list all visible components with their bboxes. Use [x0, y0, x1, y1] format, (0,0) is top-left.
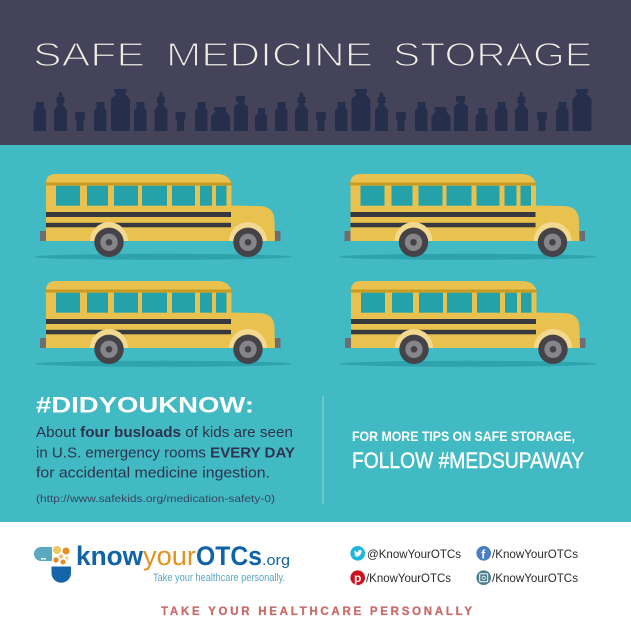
- heading: did you know: #DIDYOUKNOW:: [36, 392, 254, 418]
- footer slogan: TAKE YOUR HEALTHCARE PERSONALLY: [161, 606, 472, 618]
- source citation: (http://www.safekids.org/medication-safety-0): [36, 493, 275, 505]
- logo wordmark: [76, 541, 290, 571]
- title: STORAGE: [393, 37, 592, 74]
- callout: follow hashtag: FOLLOW #MEDSUPAWAY: [352, 448, 584, 473]
- bus: top right: [338, 174, 596, 260]
- title: SAFE: [33, 37, 145, 74]
- divider: [322, 396, 324, 504]
- social: twitter: @KnowYourOTCs: [367, 547, 461, 561]
- logo wordmark: your: [143, 541, 196, 571]
- text block: statistic: About four busloads of kids are seen: [36, 424, 293, 441]
- logo wordmark: .org: [262, 552, 290, 569]
- icon: know your OTCs logo mark: [34, 546, 71, 583]
- social: facebook: /KnowYourOTCs: [492, 547, 578, 561]
- social: pinterest: /KnowYourOTCs: [366, 571, 451, 585]
- bus: top left: [34, 174, 292, 260]
- bus: bottom left: [34, 281, 292, 367]
- text block: statistic: in U.S. emergency rooms EVERY DAY: [36, 445, 295, 462]
- callout: follow hashtag: FOR MORE TIPS ON SAFE STORAGE,: [352, 429, 575, 444]
- callout: follow hashtag: [352, 429, 584, 473]
- social: pinterest: p: [354, 571, 361, 585]
- panel: header: [0, 0, 631, 145]
- logo wordmark: OTCs: [196, 541, 262, 571]
- text block: statistic: [36, 424, 295, 482]
- title: [33, 37, 592, 74]
- social: instagram: /KnowYourOTCs: [492, 571, 578, 585]
- bus: bottom right: [339, 281, 597, 367]
- logo wordmark: know: [76, 541, 144, 571]
- title: MEDICINE: [166, 37, 373, 74]
- logo tagline: Take your healthcare personally.: [153, 572, 285, 584]
- panel: footer: [0, 522, 631, 640]
- social: facebook: f: [481, 548, 486, 562]
- panel: teal main area: [0, 145, 631, 522]
- text block: statistic: for accidental medicine ingestion.: [36, 465, 270, 482]
- icon row: medicine bottles: [34, 89, 592, 131]
